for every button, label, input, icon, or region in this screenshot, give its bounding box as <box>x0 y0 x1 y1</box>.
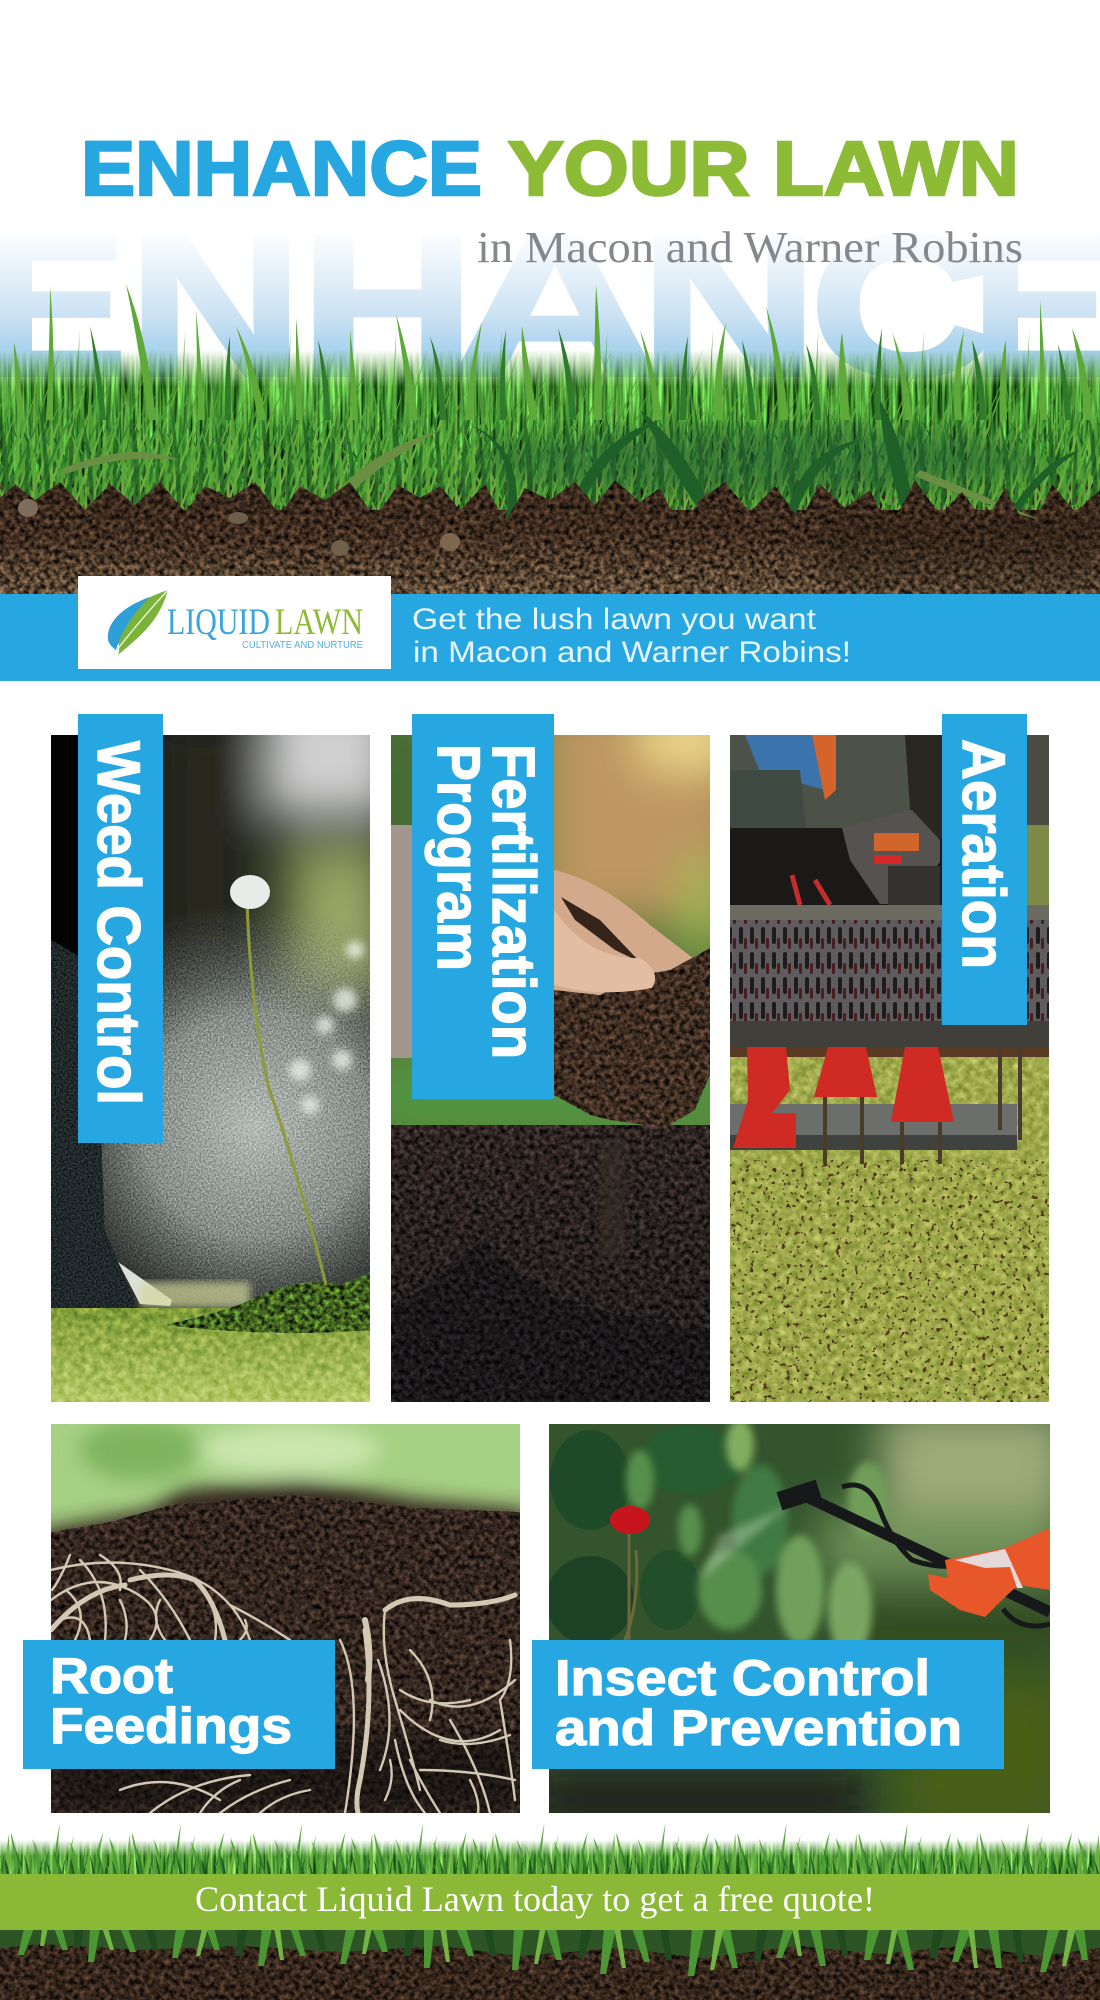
label: aeration <box>942 714 1027 1025</box>
falling soil <box>600 1140 626 1260</box>
tractor <box>730 735 1049 910</box>
hero grass <box>0 284 1100 520</box>
label: insect control and prevention <box>532 1640 1004 1769</box>
icon: leaf and water drop <box>108 590 168 655</box>
panel: aeration photo <box>730 735 1049 1402</box>
tine shadows <box>730 1047 1049 1057</box>
ghost word ENHANCE in pale blue gradient letters: N <box>640 192 818 418</box>
tall blades rising above the lawn <box>14 284 1092 420</box>
logo: LAWN <box>275 602 363 643</box>
perforated drum <box>730 906 1049 1021</box>
soil ground <box>391 1125 710 1402</box>
title: YOUR LAWN <box>508 126 1019 212</box>
ghost word ENHANCE in pale blue gradient letters: H <box>300 192 475 418</box>
footer soil and lower grass <box>0 1928 1100 2000</box>
thumb <box>554 910 655 992</box>
label: aeration: Aeration <box>950 739 1017 969</box>
panel: insect control photo <box>549 1424 1050 1813</box>
roller <box>730 1104 1017 1150</box>
fingers <box>554 870 702 1040</box>
red tines <box>733 1047 954 1148</box>
label: root feedings: Feedings <box>50 1698 292 1754</box>
label: fertilization program <box>412 714 554 1099</box>
banner text <box>412 603 851 669</box>
title <box>81 126 1019 212</box>
label: weed control: Weed Control <box>85 741 152 1105</box>
logo <box>78 576 391 669</box>
title: ENHANCE <box>81 126 482 212</box>
ghost word ENHANCE in pale blue gradient letters: N <box>128 192 303 418</box>
label: fertilization program: Program <box>425 744 492 971</box>
soil mound <box>391 1237 710 1402</box>
panel: fertilization photo <box>391 735 710 1402</box>
banner text: Get the lush lawn you want <box>412 603 817 636</box>
logo tagline: CULTIVATE AND NURTURE <box>242 640 363 651</box>
label: root feedings: Root <box>50 1648 173 1704</box>
hero soil strip <box>0 462 1100 596</box>
footer grass above band <box>0 1820 1100 1876</box>
dandelion <box>230 875 326 1285</box>
contact text: Contact Liquid Lawn today to get a free quote! <box>195 1879 875 1919</box>
green contact band <box>0 1874 1100 1930</box>
panel: weed control photo <box>51 735 370 1402</box>
foliage <box>546 1426 740 1644</box>
spray mist <box>700 1505 790 1580</box>
banner text: in Macon and Warner Robins! <box>413 636 851 669</box>
ghost word ENHANCE in pale blue gradient letters: A <box>450 192 660 418</box>
weed clump <box>165 1272 370 1333</box>
label: insect control and prevention: Insect Control <box>555 1650 930 1706</box>
label: insect control and prevention: and Prevention <box>555 1700 962 1756</box>
label: root feedings <box>23 1640 335 1769</box>
logo wordmark: LIQUID <box>167 602 270 643</box>
rose <box>610 1506 650 1640</box>
forearm <box>391 825 413 1058</box>
spray wand <box>777 1480 1050 1626</box>
label: fertilization program: Fertilization <box>480 744 547 1059</box>
handful of soil <box>554 948 710 1128</box>
orange glove <box>928 1528 1050 1617</box>
blue banner <box>0 594 1100 681</box>
panel: root feedings photo <box>51 1424 520 1813</box>
roots <box>51 1555 515 1813</box>
subtitle: in Macon and Warner Robins <box>477 223 1023 272</box>
ghost word ENHANCE in pale blue gradient letters: C <box>809 192 996 418</box>
ghost word ENHANCE in pale blue gradient letters <box>0 192 1100 418</box>
